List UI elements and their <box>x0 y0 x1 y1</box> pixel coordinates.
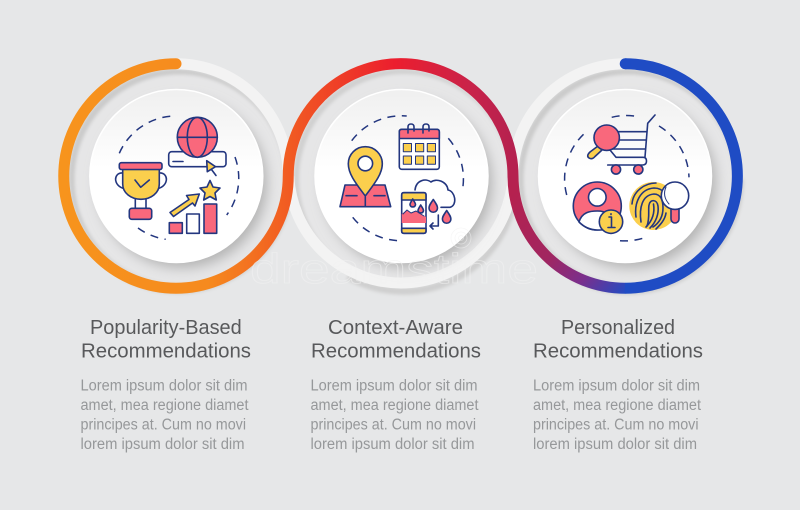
panel: personalized disc <box>538 90 712 262</box>
dashed orbit <box>352 116 463 241</box>
panel: popularity-based disc <box>90 90 263 262</box>
text block: context-aware <box>310 316 481 453</box>
gradient looping ring <box>64 58 737 288</box>
icon: rising bar chart with star <box>169 180 220 233</box>
panel: context-aware disc <box>315 90 488 262</box>
icon: user info <box>573 182 623 233</box>
plate crescents <box>69 69 734 284</box>
text block: popularity-based: Recommendations <box>81 340 251 362</box>
body copy: amet, mea regione diamet <box>533 397 702 414</box>
icon: trophy <box>116 163 166 219</box>
heading: Popularity-Based <box>90 316 242 339</box>
icon: globe with search bar <box>169 117 226 176</box>
text block: personalized: Recommendations <box>533 340 703 362</box>
icon: phone with rain cloud <box>402 180 455 233</box>
body copy: amet, mea regione diamet <box>80 397 249 414</box>
watermark <box>250 228 538 292</box>
text block: popularity-based <box>80 316 251 453</box>
body copy: Lorem ipsum dolor sit dim <box>80 378 248 394</box>
body copy <box>310 378 479 453</box>
icon: calendar <box>399 124 439 169</box>
light ring tracks <box>176 64 625 283</box>
icon: map pin <box>340 147 391 207</box>
body copy: principes at. Cum no movi <box>80 416 246 434</box>
disc shadows <box>97 98 716 268</box>
body copy: principes at. Cum no movi <box>310 416 476 434</box>
watermark: dreamstime <box>250 245 538 292</box>
body copy <box>80 378 249 453</box>
body copy: Lorem ipsum dolor sit dim <box>310 378 478 394</box>
icon: shopping cart with magnifier <box>588 115 655 174</box>
body copy: principes at. Cum no movi <box>533 416 698 434</box>
ring shadows <box>122 178 740 291</box>
text block: personalized <box>533 316 703 453</box>
icon: fingerprint scan <box>629 182 689 230</box>
text block: context-aware: Recommendations <box>311 340 481 362</box>
dashed orbit <box>119 116 239 239</box>
body copy: lorem ipsum dolor sit dim <box>533 436 697 453</box>
body copy: lorem ipsum dolor sit dim <box>310 436 474 453</box>
heading: Context-Aware <box>328 316 463 339</box>
body copy: lorem ipsum dolor sit dim <box>80 436 244 453</box>
body copy: amet, mea regione diamet <box>310 397 479 414</box>
heading: Personalized <box>561 316 675 339</box>
dashed orbit <box>565 116 689 241</box>
body copy: Lorem ipsum dolor sit dim <box>533 378 700 394</box>
body copy <box>533 378 702 453</box>
